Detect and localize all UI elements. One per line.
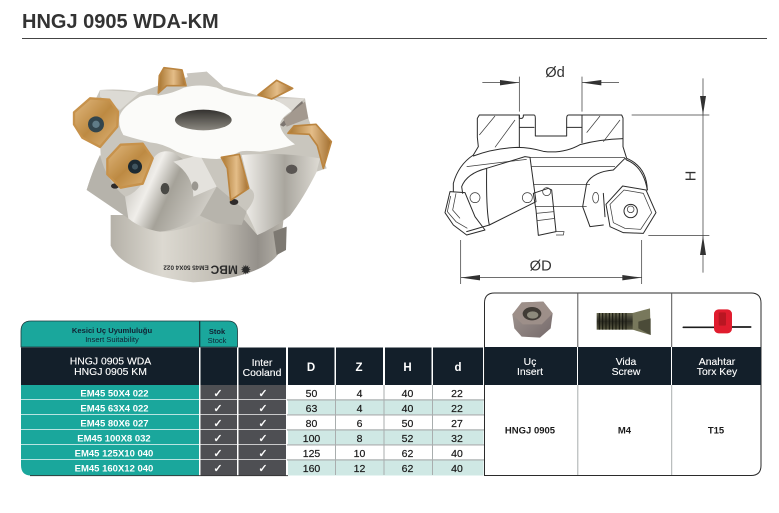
- tool outline: [445, 115, 656, 235]
- gold inserts: [74, 68, 331, 200]
- dimension value rows: 63: [306, 403, 317, 415]
- stock and coolant check columns: ✓: [258, 417, 268, 430]
- model name column: EM45 100X8 032: [77, 434, 151, 444]
- dimension value rows: 80: [306, 418, 317, 430]
- table header: insert suitability: Stok: [209, 327, 226, 336]
- stock and coolant check columns: ✓: [258, 447, 268, 460]
- table frame: [484, 293, 761, 476]
- cutter shank: [111, 215, 287, 282]
- cutter body: [80, 72, 327, 235]
- dimension value rows: [287, 385, 484, 476]
- model name column: [21, 385, 199, 476]
- stock and coolant check columns: ✓: [213, 417, 223, 430]
- accessory values: M4: [618, 426, 632, 436]
- dimension Ød: [482, 65, 619, 112]
- dimension value rows: 22: [451, 388, 463, 400]
- stock and coolant check columns: ✓: [213, 447, 223, 460]
- table dark header row: HNGJ 0905 WDA: [70, 356, 151, 368]
- table dark header row: d: [454, 362, 462, 374]
- dimension value rows: 50: [402, 418, 413, 430]
- dimension value rows: 52: [402, 433, 413, 445]
- table dark header row: D: [307, 362, 315, 374]
- accessory values: [505, 426, 725, 436]
- dimension value rows: 50: [306, 388, 317, 400]
- dimension value rows: 40: [402, 388, 413, 400]
- table header: insert suitability: Kesici Uç Uyumluluğu: [72, 326, 152, 335]
- dimension value rows: 160: [303, 463, 320, 475]
- table header: insert suitability: Stock: [208, 336, 227, 345]
- model name column: EM45 80X6 027: [80, 418, 149, 430]
- icon: screw: [597, 308, 651, 335]
- stock and coolant check columns: [200, 385, 286, 476]
- accessory header row: Insert: [517, 367, 543, 378]
- dimension value rows: 6: [357, 418, 363, 430]
- dimension ØD: ØD: [530, 259, 552, 275]
- dimension value rows: 32: [451, 433, 463, 445]
- accessory values: HNGJ 0905: [505, 426, 556, 436]
- dimension value rows: 10: [354, 448, 365, 460]
- centre bore: [175, 110, 232, 130]
- accessory header row: Vida: [616, 357, 637, 368]
- stock and coolant check columns: ✓: [213, 432, 223, 445]
- dimension ØD: [461, 240, 642, 284]
- dimension value rows: 40: [451, 463, 463, 475]
- icon: torx key: [683, 309, 751, 333]
- model name column: EM45 63X4 022: [80, 404, 149, 414]
- right accessory table: [484, 293, 761, 476]
- dimension value rows: 62: [402, 448, 413, 460]
- dimension Ød: Ød: [545, 65, 565, 81]
- stock and coolant check columns: ✓: [213, 387, 223, 400]
- table header: insert suitability: Insert Suitability: [85, 335, 139, 344]
- accessory header row: Torx Key: [697, 367, 738, 378]
- top face: [119, 85, 295, 159]
- table dark header row: Cooland: [243, 368, 282, 379]
- table dark header row: H: [403, 362, 412, 374]
- dimension value rows: 27: [451, 418, 463, 430]
- stock and coolant check columns: ✓: [213, 462, 223, 475]
- dimension value rows: 8: [357, 433, 363, 445]
- stock and coolant check columns: ✓: [213, 402, 223, 415]
- dimension H: [632, 78, 709, 273]
- table dark header row: HNGJ 0905 KM: [74, 367, 147, 378]
- stock and coolant check columns: ✓: [258, 432, 268, 445]
- engraved marking: ✹ MBC EM45 50X4 022: [163, 263, 252, 277]
- table dark header row: Z: [355, 362, 363, 374]
- table header: insert suitability: [21, 321, 238, 347]
- technical drawing: [445, 65, 709, 284]
- accessory header row: Screw: [612, 367, 641, 378]
- dimension value rows: 12: [354, 463, 365, 475]
- dimension value rows: 62: [402, 463, 413, 475]
- table dark header row: Inter: [252, 358, 273, 369]
- title: HNGJ 0905 WDA-KM: [22, 11, 219, 33]
- dimension value rows: 125: [303, 448, 320, 460]
- accessory header row: Uç: [524, 357, 536, 368]
- table dark header row: [21, 348, 483, 385]
- stock and coolant check columns: ✓: [258, 387, 268, 400]
- icon: insert: [512, 302, 553, 338]
- dimension value rows: 40: [451, 448, 463, 460]
- dimension value rows: 40: [402, 403, 413, 415]
- dimension H: H: [683, 171, 699, 181]
- accessory header row: Anahtar: [699, 357, 736, 368]
- model name column: EM45 125X10 040: [75, 448, 153, 460]
- dimension value rows: 4: [357, 388, 363, 400]
- stock and coolant check columns: ✓: [258, 402, 268, 415]
- left table: [21, 321, 484, 476]
- stock and coolant check columns: ✓: [258, 462, 268, 475]
- model name column: EM45 50X4 022: [80, 388, 149, 400]
- model name column: EM45 160X12 040: [75, 464, 153, 474]
- accessory values: T15: [708, 426, 725, 436]
- dimension value rows: 4: [357, 403, 363, 415]
- dimension value rows: 22: [451, 403, 463, 415]
- accessory header row: [484, 347, 761, 385]
- product photo: milling cutter: [74, 68, 331, 282]
- dimension value rows: 100: [303, 433, 320, 445]
